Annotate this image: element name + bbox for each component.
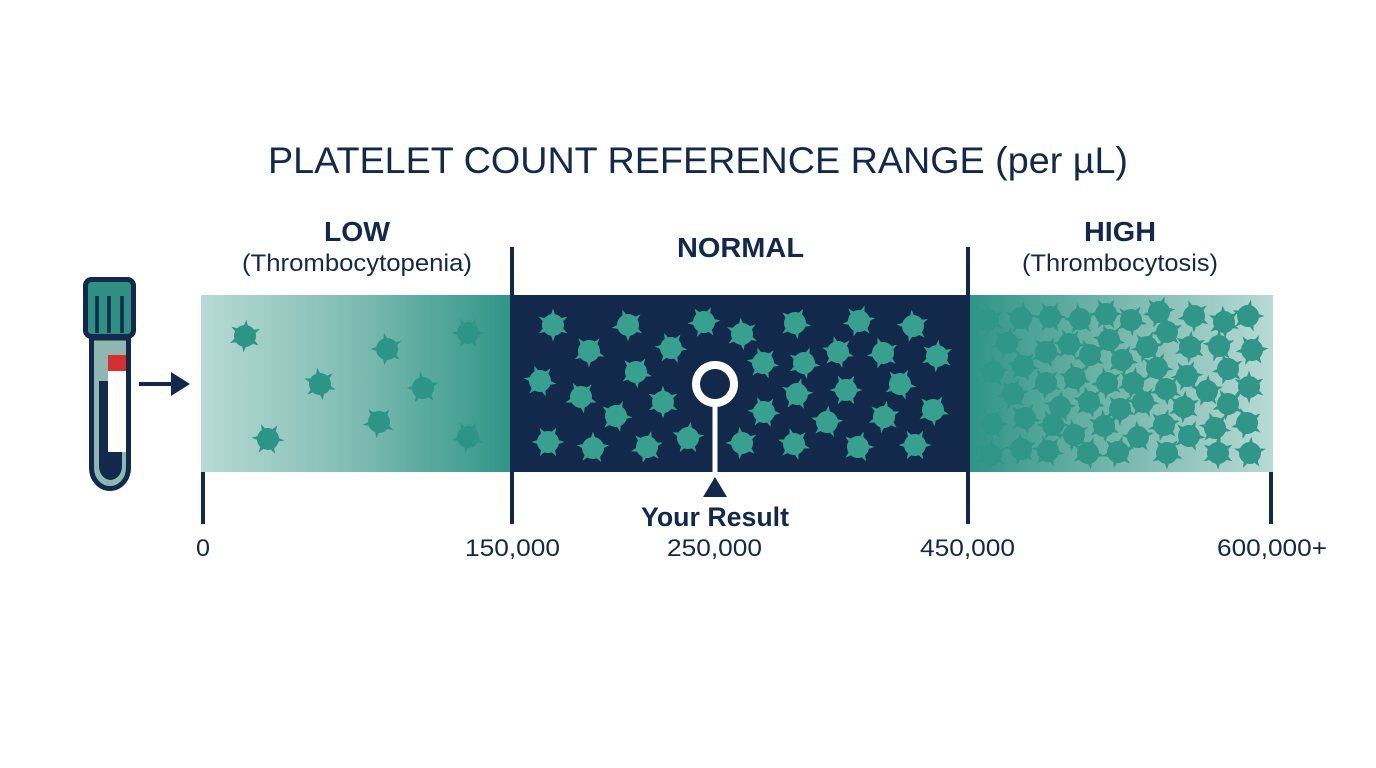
- normal platelets: [518, 299, 956, 470]
- axis labels: 450,000: [920, 535, 1015, 562]
- heading: normal: NORMAL: [677, 232, 804, 263]
- panel: normal range: [510, 295, 970, 472]
- axis labels: [196, 535, 1327, 562]
- icon: blood collection tube: [86, 280, 134, 488]
- label: your result: Your Result: [641, 502, 789, 532]
- heading: low: [242, 216, 472, 277]
- heading: high: HIGH: [1084, 216, 1156, 247]
- heading: low: LOW: [324, 216, 391, 247]
- heading: low: (Thrombocytopenia): [242, 250, 472, 277]
- tick marks: [201, 247, 1273, 524]
- result marker: [696, 365, 734, 497]
- title: PLATELET COUNT REFERENCE RANGE (per µL): [268, 139, 1128, 181]
- panel: low range: [201, 295, 510, 472]
- axis labels: 250,000: [667, 535, 762, 562]
- axis labels: 0: [196, 535, 210, 562]
- heading: high: [1022, 216, 1218, 277]
- high platelets: [970, 290, 1274, 475]
- arrow: tube to range bar: [139, 372, 190, 396]
- axis labels: 150,000: [465, 535, 560, 562]
- axis labels: 600,000+: [1217, 535, 1327, 562]
- panel: high range: [970, 290, 1274, 475]
- heading: high: (Thrombocytosis): [1022, 250, 1218, 277]
- low platelets: [226, 311, 490, 459]
